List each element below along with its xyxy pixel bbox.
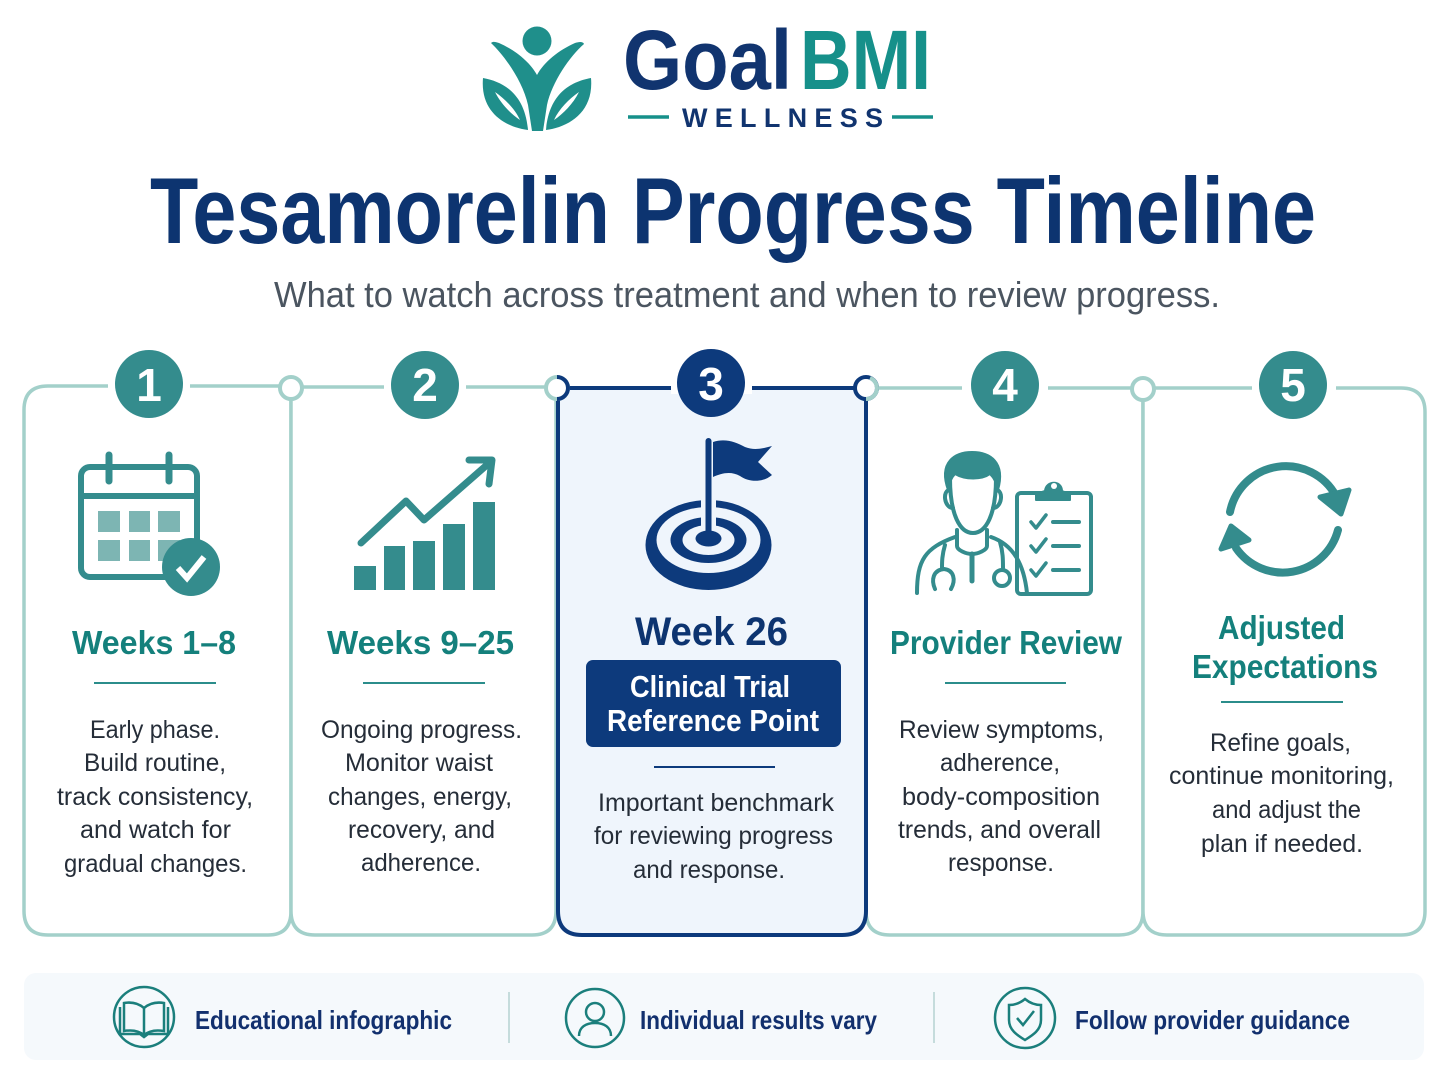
step number 4: 4 [992, 359, 1018, 411]
step number 5 [1252, 351, 1336, 419]
icon: open book [114, 987, 174, 1047]
body text: body-composition [902, 783, 1100, 811]
body text: continue monitoring, [1169, 762, 1394, 790]
subtitle: What to watch across treatment and when to review progress. [274, 274, 1220, 315]
body text: and adjust the [1212, 796, 1361, 824]
logo wordmark: Goal [623, 13, 792, 107]
body text: adherence. [361, 849, 481, 877]
body text: and watch for [80, 816, 231, 844]
body text: Ongoing progress. [321, 716, 522, 744]
body text [898, 716, 1104, 877]
icon: refresh arrows [1221, 466, 1349, 573]
card outline [291, 387, 556, 935]
badge: clinical trial reference point: Reference Point [607, 703, 819, 738]
heading: Adjusted [1218, 609, 1345, 646]
step number 1 [108, 350, 190, 418]
panel: adjusted expectations [1143, 351, 1425, 935]
badge: clinical trial reference point [586, 660, 841, 747]
body text: Monitor waist [345, 749, 493, 777]
icon: rising chart [354, 460, 495, 590]
body text: adherence, [940, 749, 1060, 777]
panel: week 1-8 [24, 350, 291, 935]
body text: Refine goals, [1210, 729, 1351, 757]
body text: for reviewing progress [594, 822, 833, 850]
body text: recovery, and [348, 816, 495, 844]
logo mark [483, 26, 591, 131]
body text [321, 716, 522, 877]
body text: response. [948, 849, 1054, 877]
footer bar [24, 973, 1424, 1060]
step number 2 [384, 351, 466, 419]
card outline [558, 388, 866, 935]
logo: GoalBMI Wellness: BMI [800, 13, 931, 107]
card outline [1143, 388, 1425, 935]
footer text: individual: Individual results vary [640, 1005, 877, 1035]
body text: and response. [633, 856, 785, 884]
body text: Build routine, [84, 749, 226, 777]
heading: Provider Review [890, 624, 1122, 661]
heading: Weeks 9–25 [327, 624, 514, 661]
icon: doctor with clipboard [917, 452, 1091, 594]
heading: Week 26 [635, 610, 788, 654]
badge: clinical trial reference point: Clinical Trial [630, 669, 790, 704]
icon: flag on target [646, 440, 772, 590]
body text: changes, energy, [328, 783, 512, 811]
body text [594, 789, 834, 884]
step number 3: 3 [698, 358, 724, 410]
panel: provider review [866, 351, 1143, 935]
step number 4 [962, 351, 1048, 419]
icon: shield [995, 988, 1055, 1048]
icon: calendar with check [80, 455, 220, 596]
footer text: educational: Educational infographic [195, 1005, 452, 1035]
body text: Important benchmark [598, 789, 834, 817]
body text: plan if needed. [1201, 830, 1363, 858]
footer text: provider guidance: Follow provider guidance [1075, 1005, 1350, 1035]
heading: Weeks 1–8 [72, 624, 236, 661]
timeline nodes [280, 377, 1154, 400]
panel: weeks 9-25 [291, 351, 556, 935]
icon: person [566, 989, 624, 1047]
body text: track consistency, [57, 783, 253, 811]
panel: week 26 highlighted [558, 349, 866, 935]
heading [1192, 609, 1378, 685]
step number 1: 1 [136, 359, 162, 411]
body text [57, 716, 253, 878]
body text: trends, and overall [898, 816, 1101, 844]
card outline [24, 386, 291, 935]
body text: Review symptoms, [899, 716, 1104, 744]
logo: GoalBMI Wellness [483, 13, 933, 133]
body text: gradual changes. [64, 850, 247, 878]
heading: Expectations [1192, 648, 1378, 685]
step number 5: 5 [1280, 359, 1306, 411]
step number 2: 2 [412, 359, 438, 411]
logo: GoalBMI Wellness: WELLNESS [682, 103, 883, 133]
body text: Early phase. [90, 716, 220, 744]
step number 3 [671, 349, 752, 417]
card outline [866, 388, 1143, 935]
body text [1169, 729, 1394, 858]
